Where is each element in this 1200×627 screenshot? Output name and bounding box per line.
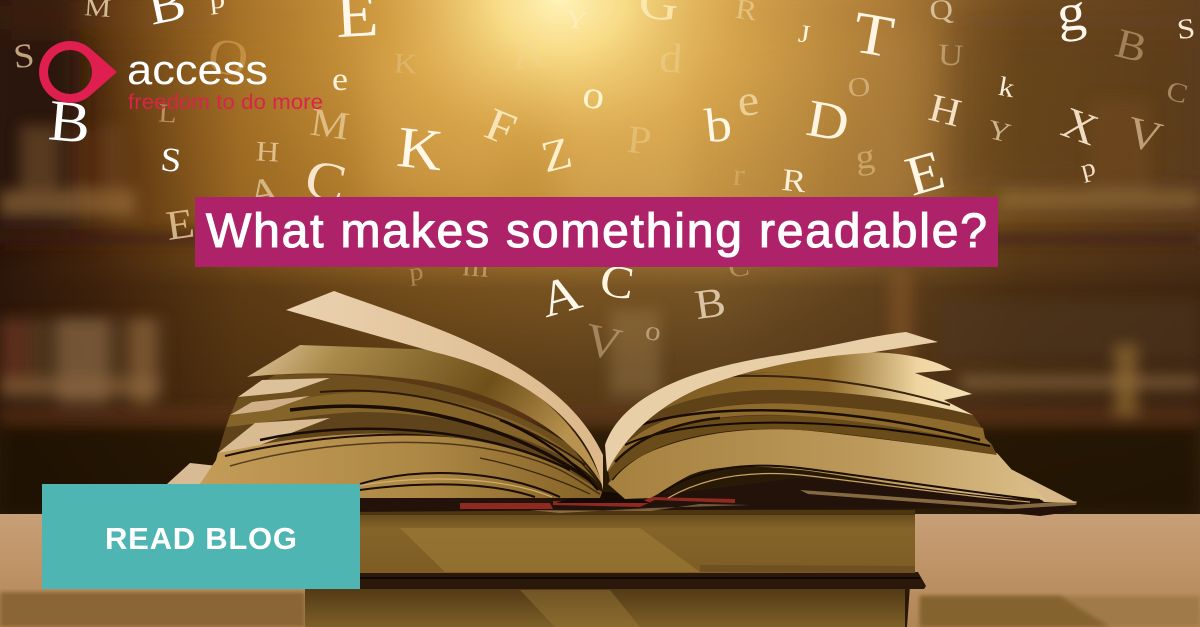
floating letters: S (1175, 12, 1197, 45)
floating letters (12, 0, 1197, 371)
floating letters: T (848, 0, 898, 71)
floating letters: P (625, 117, 654, 163)
stacked books under the open book (305, 510, 926, 627)
floating letters: U (937, 38, 964, 73)
floating letters: b (702, 97, 734, 153)
left fanned leaves (218, 345, 603, 490)
floating letters: V (1122, 107, 1167, 162)
title banner: What makes something readable? (206, 205, 987, 258)
floating letters: J (797, 19, 812, 48)
floating letters: B (1111, 20, 1152, 72)
logo: access (39, 41, 323, 114)
floating letters: E (163, 200, 197, 249)
left turning page (286, 291, 603, 490)
floating letters: r (731, 158, 746, 193)
floating letters: L (157, 99, 178, 129)
floating letters: Y (984, 115, 1014, 149)
floating letters: C (1163, 76, 1191, 110)
floating letters: C (300, 148, 352, 215)
floating letters: O (205, 28, 252, 88)
floating letters: o (580, 71, 608, 118)
floating letters: K (393, 47, 418, 80)
floating letters: A (245, 167, 283, 216)
floating letters: R (780, 163, 808, 200)
floating letters: E (899, 138, 951, 208)
floating letters: B (692, 279, 728, 329)
floating letters: H (255, 135, 280, 168)
floating letters: A (509, 27, 548, 79)
floating letters: o (643, 316, 663, 348)
floating letters: M (308, 99, 352, 148)
button: read blog (42, 484, 360, 589)
floating letters: e (734, 75, 762, 126)
floating letters: p (1078, 153, 1098, 183)
floating letters: C (597, 255, 637, 310)
floating letters: S (12, 36, 36, 76)
button: read blog: READ BLOG (105, 521, 297, 556)
right turning page (605, 332, 938, 472)
floating letters: O (846, 72, 872, 104)
floating letters: X (1055, 97, 1105, 155)
open book (167, 291, 1077, 516)
floating letters: B (46, 88, 93, 156)
logo wordmark: access (127, 46, 268, 93)
right fanned leaves (606, 352, 997, 482)
floating letters: D (803, 88, 854, 153)
floating letters: S (159, 140, 183, 180)
floating letters: g (854, 136, 876, 176)
logo mark: red teardrop ring (39, 41, 117, 103)
floating letters: H (925, 85, 966, 135)
floating letters: d (658, 35, 684, 82)
floating letters: Z (536, 127, 577, 182)
right page block (608, 424, 1047, 502)
logo tagline: freedom to do more (128, 91, 323, 114)
floating letters: V (580, 314, 626, 371)
floating letters: k (996, 72, 1017, 104)
left page block (200, 431, 602, 498)
floating letters: F (478, 99, 523, 156)
table surface (0, 514, 1200, 627)
floating letters: Y (564, 4, 588, 35)
floating letters: e (332, 61, 348, 98)
floating letters: m (462, 249, 490, 283)
floating letters: K (394, 115, 446, 184)
floating letters: A (534, 264, 587, 329)
floating letters: C (726, 251, 751, 284)
floating letters: p (408, 257, 425, 286)
book cover and underside (167, 462, 1077, 516)
